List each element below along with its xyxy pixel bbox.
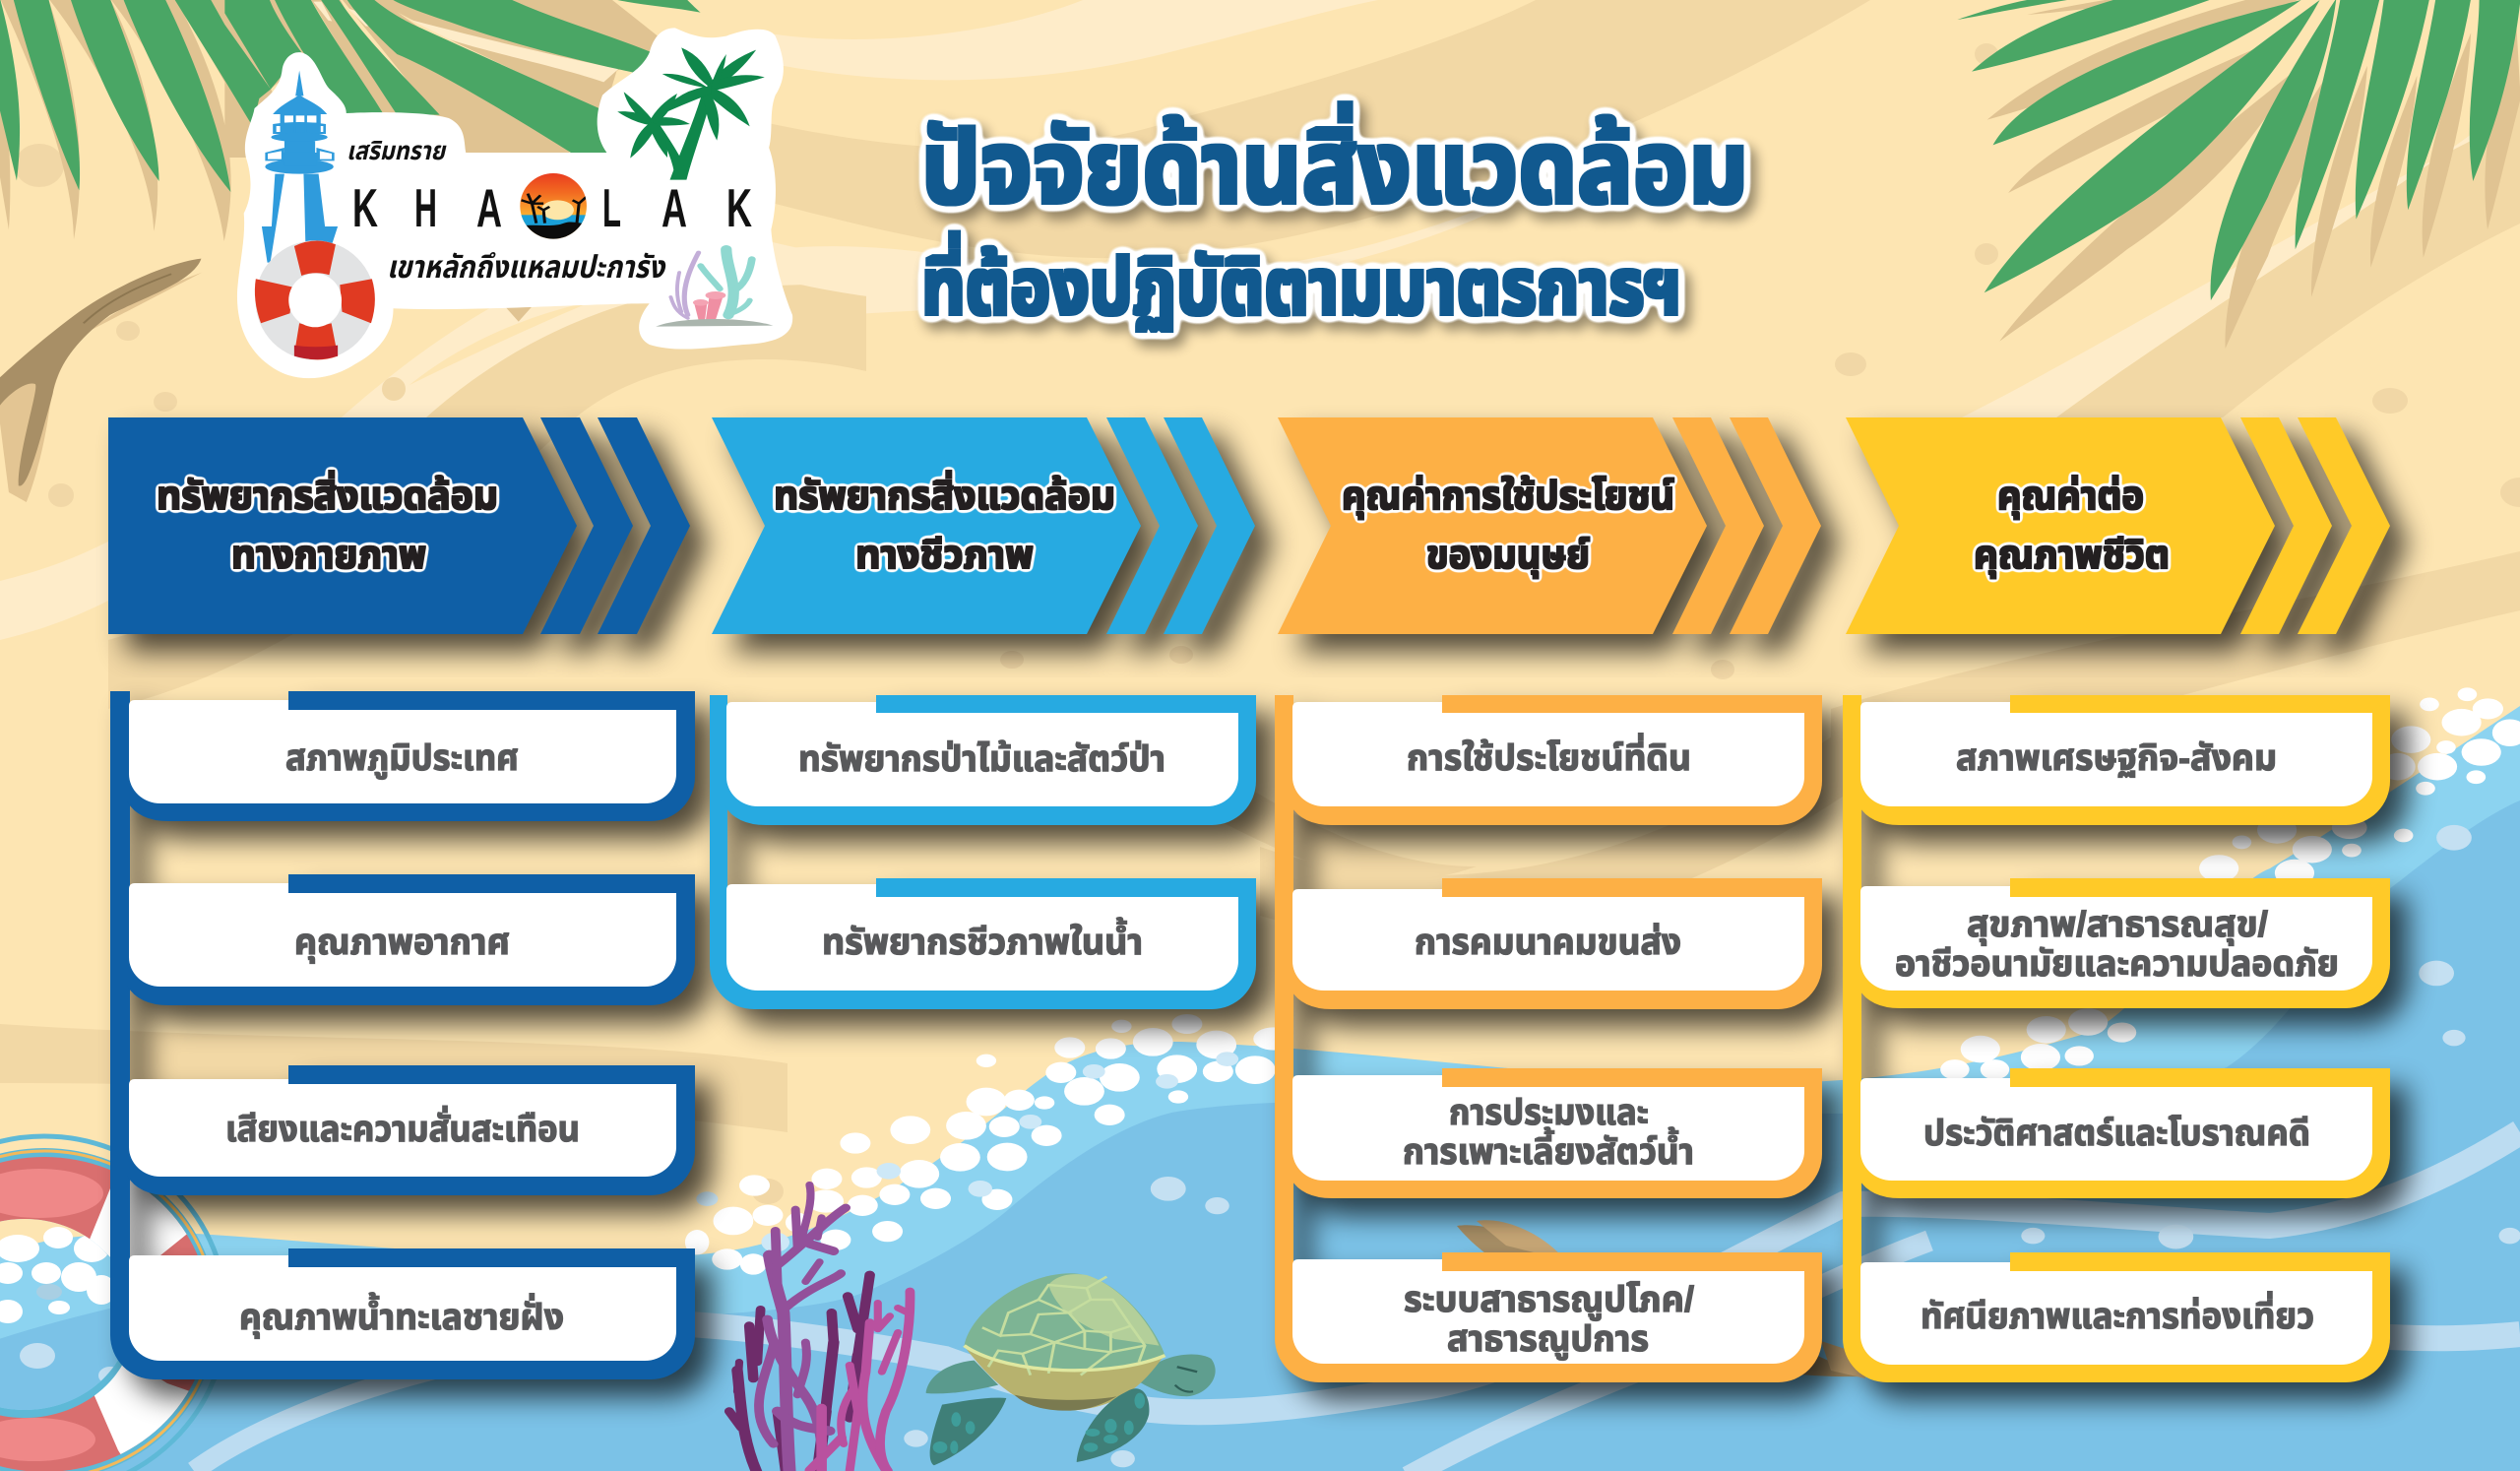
list text column 3: ระบบสาธารณูปโภค/ xyxy=(1404,1279,1694,1320)
header text column 1 xyxy=(157,470,498,577)
header text column 1: ทางกายภาพ xyxy=(231,534,426,577)
header text column 4: คุณค่าต่อ xyxy=(1997,474,2144,520)
icon: logo life ring xyxy=(255,240,375,360)
header text column 3: คุณค่าการใช้ประโยชน์ xyxy=(1342,474,1674,520)
header text column 1: ทรัพยากรสิ่งแวดล้อม xyxy=(157,470,498,518)
header text column 3 xyxy=(1342,474,1674,579)
icon: logo palm trees xyxy=(617,47,765,180)
list text column 1 xyxy=(225,737,580,1338)
list text column 1: สภาพภูมิประเทศ xyxy=(285,737,519,779)
title: ปัจจัยด้านสิ่งแวดล้อม xyxy=(921,102,1748,225)
list text column 4: ทัศนียภาพและการท่องเที่ยว xyxy=(1921,1291,2314,1336)
icon: palm leaves, top left xyxy=(0,0,701,322)
header text column 4: คุณภาพชีวิต xyxy=(1974,534,2170,579)
header text column 2: ทางชีวภาพ xyxy=(855,534,1034,577)
title: ที่ต้องปฏิบัติตามมาตรการฯ xyxy=(921,232,1681,331)
panel: header column 2 biological resources xyxy=(712,417,1255,634)
list text column 4 xyxy=(1895,737,2339,1336)
header text column 3: ของมนุษย์ xyxy=(1426,534,1590,579)
panel: list column 1 xyxy=(110,691,695,1379)
logo text xyxy=(346,136,752,285)
list text column 2: ทรัพยากรป่าไม้และสัตว์ป่า xyxy=(798,738,1166,779)
list text column 1: คุณภาพอากาศ xyxy=(294,922,510,963)
header text column 4 xyxy=(1974,474,2170,579)
panel: list column 2 xyxy=(710,695,1256,1009)
logo text: K xyxy=(726,177,752,238)
list text column 3: การเพาะเลี้ยงสัตว์น้ำ xyxy=(1403,1126,1694,1172)
list text column 3: การใช้ประโยชน์ที่ดิน xyxy=(1407,733,1691,778)
list text column 3: การคมนาคมขนส่ง xyxy=(1415,922,1681,962)
logo text: เสริมทราย xyxy=(346,136,447,165)
list text column 1: คุณภาพน้ำทะเลชายฝั่ง xyxy=(239,1292,564,1338)
background: sand dots xyxy=(15,43,2520,1204)
logo: Khao Lak sticker xyxy=(237,28,792,378)
header text column 2: ทรัพยากรสิ่งแวดล้อม xyxy=(774,470,1115,518)
driftwood behind the boxes xyxy=(1457,1220,1865,1378)
panel: header column 4 quality of life values xyxy=(1846,417,2390,634)
title xyxy=(921,102,1748,331)
panel: list column 3 xyxy=(1275,695,1822,1382)
header text column 2 xyxy=(774,470,1115,577)
list text column 4: อาชีวอนามัยและความปลอดภัย xyxy=(1895,943,2339,984)
list text column 4: ประวัติศาสตร์และโบราณคดี xyxy=(1923,1113,2310,1153)
logo text: A xyxy=(662,177,687,238)
panel: list column 4 xyxy=(1843,695,2390,1382)
logo text: K xyxy=(352,177,378,238)
panel: header column 1 physical resources xyxy=(108,417,690,634)
list text column 1: เสียงและความสั่นสะเทือน xyxy=(225,1105,580,1149)
list text column 3 xyxy=(1403,733,1694,1360)
bubbles: centre xyxy=(685,1014,1293,1467)
background: water xyxy=(0,706,2520,1471)
bubbles: right xyxy=(1940,687,2520,1248)
logo text: เขาหลักถึงแหลมปะการัง xyxy=(387,249,666,285)
list text column 2 xyxy=(798,738,1166,962)
icon: palm leaves, top right xyxy=(1957,0,2520,349)
icon: coral xyxy=(729,1184,910,1471)
list text column 3: สาธารณูปการ xyxy=(1447,1318,1649,1360)
icon: lighthouse xyxy=(262,71,338,263)
icon: sea turtle xyxy=(926,1273,1216,1465)
list text column 3: การประมงและ xyxy=(1449,1092,1649,1132)
icon: logo coral xyxy=(670,249,752,318)
logo text: A xyxy=(476,177,502,238)
icon: sunset oval xyxy=(520,173,587,239)
panel: header column 3 human use values xyxy=(1278,417,1821,634)
list text column 2: ทรัพยากรชีวภาพในน้ำ xyxy=(822,917,1143,962)
icon: life ring, bottom left xyxy=(0,1134,219,1471)
logo text: H xyxy=(414,177,437,238)
list text column 4: สุขภาพ/สาธารณสุข/ xyxy=(1967,904,2268,945)
icon: driftwood, left xyxy=(0,259,202,502)
logo sticker backing xyxy=(237,28,792,378)
list text column 4: สภาพเศรษฐกิจ-สังคม xyxy=(1956,737,2277,778)
logo text: L xyxy=(602,177,621,238)
